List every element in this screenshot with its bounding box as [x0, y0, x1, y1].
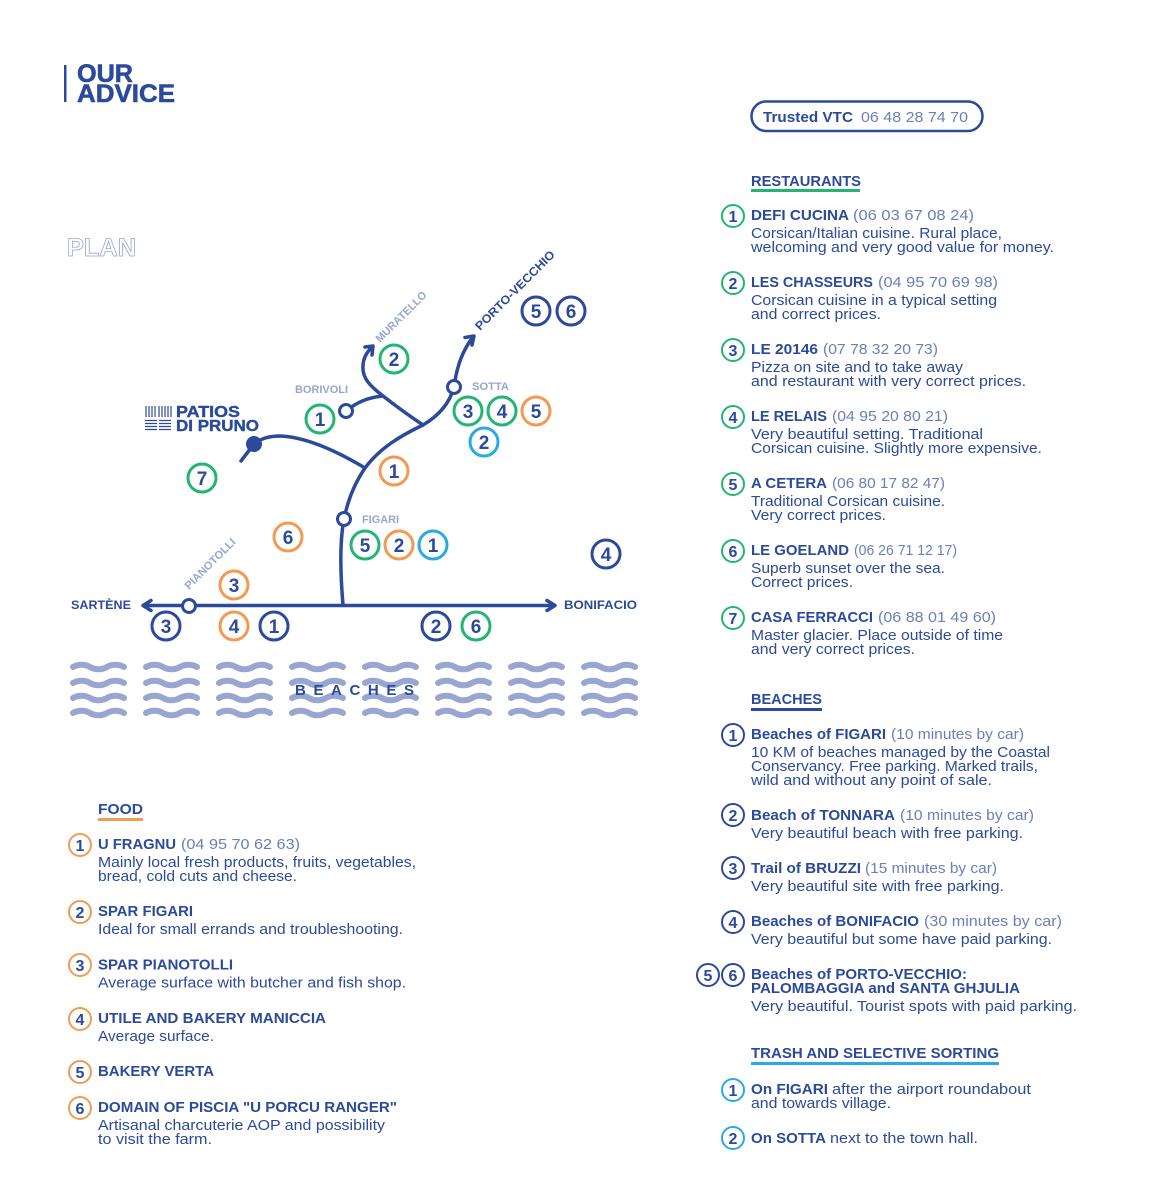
beach 1: Beaches of FIGARI [751, 726, 886, 743]
beach 3: Trail of BRUZZI [751, 860, 861, 877]
restaurant 5: (06 80 17 82 47) [832, 475, 945, 492]
restaurant 5: Traditional Corsican cuisine. [751, 493, 945, 510]
restaurant 3: Pizza on site and to take away [751, 359, 964, 376]
food item 1: U FRAGNU [98, 836, 176, 853]
trash 1: and towards village. [751, 1095, 891, 1112]
heading: plan: PLAN [67, 234, 136, 262]
map markers: 6 [471, 617, 481, 638]
restaurant 2 [722, 272, 998, 323]
restaurant 1 [722, 205, 1054, 256]
restaurant 2: and correct prices. [751, 306, 881, 323]
logo: Patios di Pruno: PATIOS [176, 404, 240, 421]
map markers: 3 [161, 617, 171, 638]
restaurant 6: LE GOELAND [751, 542, 849, 559]
panel: trash and selective sorting [722, 1045, 1032, 1149]
beach 3: (15 minutes by car) [865, 860, 997, 877]
food item 3 [69, 954, 406, 992]
food item 1 [69, 834, 416, 885]
map markers: 7 [197, 469, 207, 490]
callout: trusted VTC [752, 102, 982, 131]
map markers: 3 [229, 576, 239, 597]
map labels: SARTÈNE [71, 597, 131, 612]
beach 5 and 6: PALOMBAGGIA and SANTA GHJULIA [751, 980, 1020, 997]
food item 2 [69, 901, 403, 938]
restaurant 5 [722, 473, 945, 524]
food item 6: 6 [76, 1101, 85, 1118]
trash 2: On SOTTA [751, 1130, 826, 1147]
map markers: 5 [531, 302, 542, 323]
beach 2: Very beautiful beach with free parking. [751, 825, 1023, 842]
restaurant 1: welcoming and very good value for money. [750, 239, 1054, 256]
map markers: 3 [463, 402, 473, 423]
beach 3: Very beautiful site with free parking. [751, 878, 1004, 895]
panel: beaches [697, 691, 1077, 1015]
beach 2: Beach of TONNARA [751, 807, 895, 824]
map markers: 6 [566, 302, 576, 323]
food item 5 [69, 1061, 214, 1083]
beaches waves [73, 665, 635, 715]
restaurant 1: (06 03 67 08 24) [853, 207, 974, 224]
food item 3: 3 [76, 958, 85, 975]
beach 3: 3 [729, 861, 738, 878]
food item 1: Mainly local fresh products, fruits, vegetables, [98, 854, 416, 871]
restaurant 3 [722, 339, 1026, 390]
restaurant 7: and very correct prices. [751, 641, 915, 658]
panel: restaurants [722, 173, 1054, 658]
map markers: 2 [479, 433, 489, 454]
beach 4: Beaches of BONIFACIO [751, 913, 919, 930]
map markers [152, 297, 620, 640]
map markers: 6 [283, 528, 293, 549]
restaurant 3: LE 20146 [751, 341, 818, 358]
food item 5: 5 [76, 1065, 85, 1082]
trash 1: 1 [729, 1083, 738, 1100]
logo: Patios di Pruno [145, 404, 259, 435]
food item 1: (04 95 70 62 63) [181, 836, 300, 853]
restaurant 5: A CETERA [751, 475, 827, 492]
beach 1: Conservancy. Free parking. Marked trails, [751, 758, 1038, 775]
beach 1: 10 KM of beaches managed by the Coastal [751, 744, 1050, 761]
food item 3: Average surface with butcher and fish shop. [98, 974, 406, 992]
restaurant 7: (06 88 01 49 60) [878, 609, 996, 626]
heading: trash: TRASH AND SELECTIVE SORTING [751, 1045, 999, 1062]
trash 1: after the airport roundabout [832, 1081, 1032, 1098]
food item 6: Artisanal charcuterie AOP and possibility [98, 1117, 386, 1134]
title: OUR [77, 60, 133, 88]
map markers: 4 [497, 402, 508, 423]
map markers: 2 [394, 536, 404, 557]
restaurant 7: 7 [729, 611, 738, 628]
restaurant 4: (04 95 20 80 21) [832, 408, 948, 425]
trash 2: next to the town hall. [830, 1130, 978, 1147]
panel: food [69, 801, 416, 1148]
restaurant 1: DEFI CUCINA [751, 207, 849, 224]
food item 1: 1 [76, 838, 85, 855]
beach 5 and 6: Beaches of PORTO-VECCHIO: [751, 966, 967, 983]
food item 2: SPAR FIGARI [98, 903, 193, 920]
restaurant 6: 6 [729, 544, 738, 561]
heading: restaurants: RESTAURANTS [751, 173, 861, 190]
restaurant 4: Corsican cuisine. Slightly more expensive. [751, 440, 1042, 457]
heading: food: FOOD [98, 801, 143, 818]
food item 1: bread, cold cuts and cheese. [98, 868, 297, 885]
map markers: 4 [601, 545, 612, 566]
trash 2 [722, 1127, 978, 1149]
food item 6 [69, 1097, 397, 1148]
map labels: BONIFACIO [564, 598, 637, 612]
food item 6: to visit the farm. [98, 1131, 212, 1148]
map markers: 4 [229, 617, 240, 638]
restaurant 7 [722, 607, 1003, 658]
beach 5 and 6: 5 [704, 968, 713, 985]
beach 1 [722, 724, 1050, 789]
restaurant 6 [722, 540, 957, 591]
food item 4: UTILE AND BAKERY MANICCIA [98, 1010, 326, 1027]
food item 4: Average surface. [98, 1028, 214, 1045]
beach 1: wild and without any point of sale. [750, 772, 992, 789]
map labels: MURATELLO [374, 289, 430, 345]
restaurant 4: Very beautiful setting. Traditional [751, 426, 983, 443]
beach 4 [722, 911, 1062, 948]
logo: Patios di Pruno: DI PRUNO [176, 418, 259, 435]
restaurant 7: Master glacier. Place outside of time [751, 627, 1003, 644]
restaurant 1: 1 [729, 209, 738, 226]
restaurant 3: (07 78 32 20 73) [823, 341, 938, 358]
restaurant 3: and restaurant with very correct prices. [751, 373, 1026, 390]
beach 4: Very beautiful but some have paid parking. [751, 931, 1052, 948]
trash 2: 2 [729, 1131, 738, 1148]
map markers: 1 [315, 410, 326, 431]
map markers: 5 [360, 536, 371, 557]
beach 4: 4 [729, 915, 738, 932]
food item 6: DOMAIN OF PISCIA "U PORCU RANGER" [98, 1099, 397, 1116]
map labels: PIANOTOLLI [183, 536, 238, 592]
restaurant 2: Corsican cuisine in a typical setting [751, 292, 997, 309]
restaurant 2: LES CHASSEURS [751, 274, 873, 291]
map labels [71, 248, 637, 612]
heading: beaches: BEACHES [751, 691, 822, 708]
map labels: FIGARI [362, 514, 399, 526]
callout: trusted VTC: Trusted VTC [763, 109, 853, 126]
food item 4: 4 [76, 1012, 85, 1029]
map labels: SOTTA [472, 381, 509, 393]
restaurant 6: Correct prices. [751, 574, 853, 591]
callout: trusted VTC: 06 48 28 74 70 [861, 109, 968, 126]
restaurant 1: Corsican/Italian cuisine. Rural place, [751, 225, 1002, 242]
restaurant 4: LE RELAIS [751, 408, 827, 425]
restaurant 4: 4 [729, 410, 738, 427]
food item 2: Ideal for small errands and troubleshooting. [98, 921, 403, 938]
food item 2: 2 [76, 905, 85, 922]
restaurant 2: 2 [729, 276, 738, 293]
map markers: 2 [389, 350, 399, 371]
title [64, 60, 175, 108]
restaurant 6: (06 26 71 12 17) [854, 542, 957, 559]
road stops [182, 380, 460, 612]
beach 1: (10 minutes by car) [891, 726, 1024, 743]
beach 3 [722, 857, 1004, 895]
map labels: BORIVOLI [295, 384, 348, 396]
restaurant 5: 5 [729, 477, 738, 494]
map markers: 2 [431, 617, 441, 638]
map labels: PORTO-VECCHIO [472, 248, 558, 333]
restaurant 6: Superb sunset over the sea. [751, 560, 945, 577]
food item 4 [69, 1008, 326, 1045]
map markers: 5 [531, 402, 542, 423]
trash 1 [722, 1079, 1032, 1112]
restaurant 2: (04 95 70 69 98) [878, 274, 998, 291]
beach 2 [722, 804, 1034, 842]
restaurant 7: CASA FERRACCI [751, 609, 873, 626]
food item 3: SPAR PIANOTOLLI [98, 956, 233, 974]
beach 5 and 6: Very beautiful. Tourist spots with paid parking. [751, 998, 1077, 1015]
beach 2: 2 [729, 808, 738, 825]
beaches label: BEACHES [295, 682, 414, 699]
food item 5: BAKERY VERTA [98, 1063, 214, 1080]
title: ADVICE [77, 80, 175, 108]
restaurant 3: 3 [729, 343, 738, 360]
map markers: 1 [389, 462, 400, 483]
restaurant 4 [722, 406, 1042, 457]
beach 4: (30 minutes by car) [924, 913, 1062, 930]
beach 1: 1 [729, 728, 738, 745]
beach 5 and 6 [697, 964, 1077, 1015]
beach 5 and 6: 6 [729, 968, 738, 985]
map [71, 248, 637, 715]
map markers: 1 [428, 536, 439, 557]
restaurant 5: Very correct prices. [751, 507, 886, 524]
trash 1: On FIGARI [751, 1081, 828, 1098]
beach 2: (10 minutes by car) [900, 807, 1034, 824]
map markers: 1 [269, 617, 280, 638]
road network [143, 336, 555, 610]
